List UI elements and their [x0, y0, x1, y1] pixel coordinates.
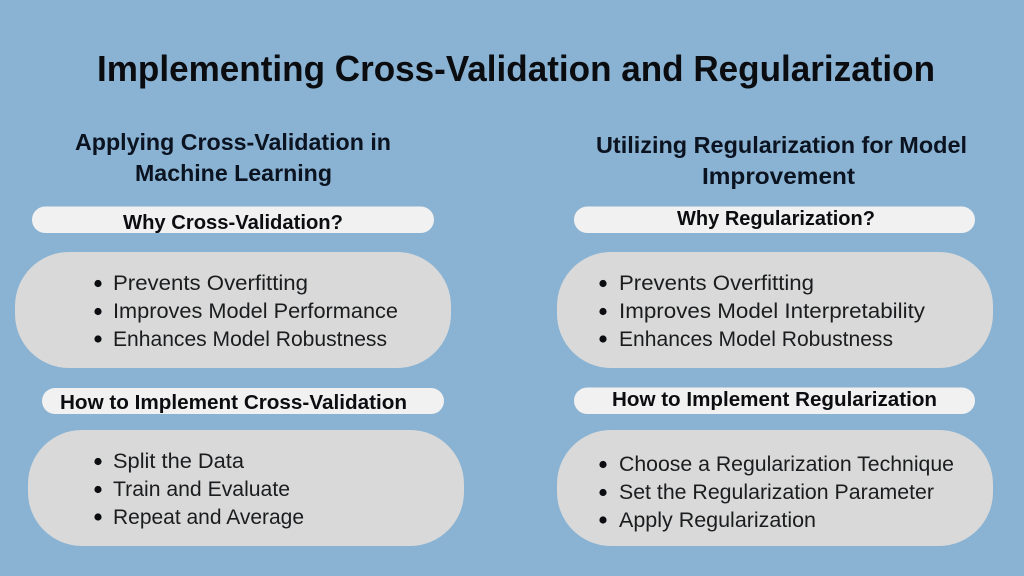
heading: applying cross-validation [75, 129, 391, 186]
subheading pill: why regularization [574, 206, 975, 233]
heading: utilizing regularization: Utilizing Regularization for Model [596, 132, 967, 158]
list panel: regularization steps: Apply Regularization [619, 509, 816, 532]
heading: utilizing regularization [596, 132, 967, 189]
heading: applying cross-validation: Machine Learning [135, 160, 332, 186]
list panel: cross-validation benefits: Enhances Model Robustness [113, 328, 387, 351]
subheading pill: why cross-validation [32, 206, 434, 234]
list panel: regularization benefits: Enhances Model Robustness [619, 328, 893, 351]
list panel: cross-validation steps: Repeat and Average [113, 506, 304, 529]
list panel: regularization benefits: Prevents Overfitting [619, 272, 814, 295]
heading: applying cross-validation: Applying Cross-Validation in [75, 129, 391, 155]
list panel: regularization steps: Choose a Regularization Technique [619, 453, 954, 476]
list panel: cross-validation benefits: Improves Model Performance [113, 300, 398, 323]
heading: utilizing regularization: Improvement [702, 163, 855, 189]
list panel: cross-validation steps: Split the Data [113, 450, 244, 473]
list panel: regularization benefits [557, 252, 993, 368]
subheading pill: how to implement cross-validation: How to Implement Cross-Validation [60, 392, 407, 414]
list panel: regularization steps: Set the Regularization Parameter [619, 481, 934, 504]
list panel: cross-validation steps: Train and Evaluate [113, 478, 290, 501]
list panel: cross-validation steps [28, 430, 464, 546]
subheading pill: how to implement regularization [574, 388, 975, 414]
subheading pill: why cross-validation: Why Cross-Validation? [123, 212, 343, 234]
list panel: regularization steps [557, 430, 993, 546]
list panel: cross-validation benefits: Prevents Overfitting [113, 272, 308, 295]
subheading pill: how to implement regularization: How to Implement Regularization [612, 389, 937, 411]
title: Implementing Cross-Validation and Regularization [97, 48, 935, 89]
panel: utilizing regularization column [557, 132, 993, 546]
list panel: cross-validation benefits [15, 252, 451, 368]
list panel: regularization benefits: Improves Model Interpretability [619, 300, 926, 323]
panel: applying cross-validation column [15, 129, 464, 546]
subheading pill: why regularization: Why Regularization? [677, 208, 875, 230]
